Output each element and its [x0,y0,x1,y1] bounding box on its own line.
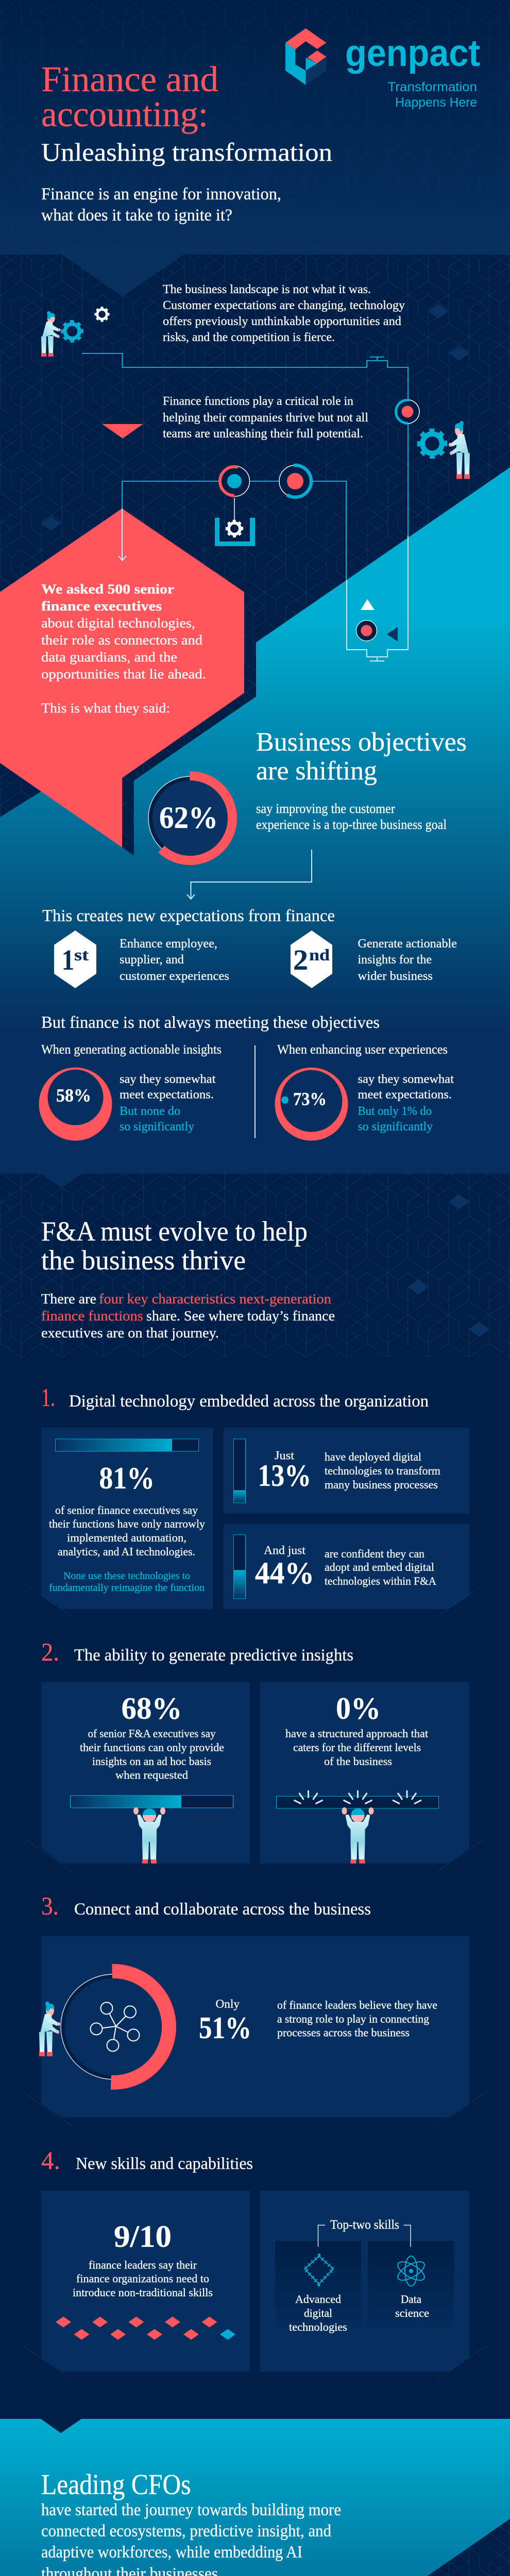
panel: 68%: when requested [115,1768,188,1782]
red hexagon panel [0,509,244,848]
panel: top-two skills [260,2191,486,2381]
panel: 13% [224,1428,469,1514]
title [41,60,332,166]
heading 1: Digital technology embedded across the organization [69,1392,429,1411]
panel: 68% [23,1682,250,1873]
text: 58% stat [120,1073,216,1133]
stat: 51%: a strong role to play in connecting [277,2012,429,2025]
text: journey: connected ecosystems, predictive insight, and [41,2522,331,2540]
decorative diamonds [408,1195,489,1336]
text: four key characteristics: There are [41,1291,96,1307]
stat: 51%: processes across the business [277,2026,410,2039]
text: business landscape [163,283,405,344]
panel: 9/10: introduce non-traditional skills [73,2286,213,2299]
icon: red triangle [102,424,143,438]
panel: 0%: have a structured approach that [285,1727,428,1740]
monitor contents [356,599,398,641]
text: four key characteristics: finance functions [41,1308,143,1324]
callout: survey text: data guardians, and the [41,650,177,665]
title: accounting: [41,95,208,134]
cyan gradient panel [0,467,510,1174]
text: 73% stat [358,1073,454,1133]
panel: 44% [224,1524,486,1618]
skill box: data science: Data [401,2293,421,2306]
heading: business objectives [256,727,467,786]
stat: 51% [199,1997,437,2045]
text: 58% stat: say they somewhat [120,1073,216,1086]
heading 3: Connect and collaborate across the business [74,1900,371,1919]
heading: F&A must evolve: F&A must evolve to help [41,1216,308,1247]
icon: person with large gear [419,421,470,479]
badge: 2nd [291,930,332,988]
text: business landscape: offers previously unthinkable opportunities and [163,315,401,328]
text: four key characteristics [41,1291,335,1341]
panel: 68%: their functions can only provide [80,1741,224,1754]
heading: leading CFOs: Leading CFOs [41,2469,191,2501]
panel: 9/10: finance organizations need to [76,2272,209,2285]
intro question: Finance is an engine for innovation, [41,185,281,204]
panel: 9/10: 9/10 [114,2219,172,2253]
title: Finance and [41,60,218,99]
text: four key characteristics: executives are on that journey. [41,1325,219,1341]
text: finance functions: teams are unleashing their full potential. [163,427,363,440]
genpact logo header [285,28,480,110]
section notch triangle [41,1174,81,1188]
panel: 13%: many business processes [325,1478,438,1491]
heading 3 [41,1891,371,1920]
intro question [41,185,281,225]
callout: survey text: finance executives [41,599,162,614]
panel: 13%: Just [275,1449,295,1462]
text: customer experience [256,801,447,832]
subheading: experiences: When enhancing user experiences [277,1043,448,1057]
panel: 81%: analytics, and AI technologies. [58,1545,195,1558]
text: finance functions: helping their companies thrive but not all [163,411,368,425]
panel: 81%: their functions have only narrowly [49,1517,205,1530]
genpact logo header: genpact [345,32,480,74]
text: journey: adaptive workforces, while embedding AI [41,2543,302,2562]
heading: business objectives: Business objectives [256,727,467,757]
text: second expectation: wider business [358,970,433,983]
text: 73% stat: But only 1% do [358,1105,432,1118]
panel: 51% [23,1936,486,2128]
patterned section background [0,1174,510,1358]
icon: person with gear [41,311,82,357]
panel: 68%: of senior F&A executives say [88,1727,215,1740]
panel: 44%: technologies within F&A [325,1574,436,1587]
icon: gauge circle right [396,400,419,423]
subheading: insights: When generating actionable insights [41,1043,222,1057]
chart: 62% donut: 62% [159,801,218,835]
badge: 1st: 1 [62,944,74,976]
skill box: data science [368,2241,454,2336]
heading: F&A must evolve: the business thrive [41,1245,246,1276]
panel: 81%: of senior finance executives say [55,1503,198,1517]
panel: 13%: technologies to transform [325,1464,440,1477]
icon: circle B [278,464,313,499]
section notch triangle [62,255,184,297]
hero background [0,0,510,255]
text: business landscape: risks, and the competition is fierce. [163,331,335,344]
callout: survey text: opportunities that lie ahead. [41,667,206,682]
chart: 58% ring: 58% [56,1085,91,1106]
text: business landscape: Customer expectations are changing, technology [163,299,405,312]
panel: 0%: of the business [324,1755,392,1768]
heading 2 [41,1637,353,1666]
panel: 0%: 0% [336,1691,381,1725]
skill box: data science: science [395,2307,429,2319]
closing gradient section [0,2419,510,2576]
skill box: advanced digital technologies: technologies [289,2320,347,2333]
badge: 2nd: 2 [293,944,308,976]
text: customer experience: experience is a top-three business goal [256,817,447,832]
badge: 2nd: nd [309,945,330,964]
callout: survey text [41,582,206,716]
icon: small white gear [95,308,109,321]
divider [254,1045,256,1138]
stat: 51%: Only [215,1997,240,2010]
badge: 1st [54,930,96,988]
panel: 81%: None use these technologies to [63,1570,190,1582]
text: 58% stat: so significantly [120,1120,194,1133]
text: journey: have started the journey towards building more [41,2501,341,2519]
text: four key characteristics: four key characteristics next-generation [99,1291,332,1307]
skill box: advanced digital technologies: digital [304,2307,332,2319]
heading: business objectives: are shifting [256,756,377,786]
text: second expectation [358,937,457,983]
callout: survey text: about digital technologies, [41,616,195,631]
text: 73% stat: say they somewhat [358,1073,454,1086]
navy diagonal corner [42,2519,510,2576]
text: finance functions: Finance functions play a critical role in [163,395,353,408]
text: second expectation: insights for the [358,953,432,967]
pipe lines [82,353,408,580]
panel: 44%: adopt and embed digital [325,1561,434,1573]
panel: 81%: fundamentally reimagine the function [49,1582,205,1594]
chart: ten diamonds [56,2316,235,2340]
callout: survey text: This is what they said: [41,701,170,716]
heading 4: New skills and capabilities [76,2155,253,2173]
panel: 68%: insights on an ad hoc basis [92,1755,211,1768]
skill box: advanced digital technologies: Advanced [295,2293,341,2306]
chart: 73% ring [275,1067,348,1141]
text: 58% stat: meet expectations. [120,1088,214,1101]
text: first expectation: Enhance employee, [120,937,217,951]
callout: survey text: We asked 500 senior [41,582,174,597]
genpact logo header: Transformation [387,80,477,94]
heading 2: 2. [41,1637,59,1666]
panel: 44%: are confident they can [325,1547,424,1560]
panel: 81%: implemented automation, [67,1531,186,1544]
panel: 81% [23,1428,213,1618]
panel: 13%: 13% [258,1459,311,1493]
panel: 13%: have deployed digital [325,1450,421,1463]
decorative diamonds [41,304,469,531]
panel: 9/10 [23,2191,250,2381]
heading: F&A must evolve [41,1216,308,1276]
chart: 62% donut [148,776,232,860]
panel: 81%: 81% [99,1461,155,1495]
arrow connector [187,850,312,899]
text: 58% stat: But none do [120,1105,180,1118]
text: 73% stat: meet expectations. [358,1088,452,1101]
label: top-two skills with bracket: Top-two skills [330,2218,399,2232]
text: journey [41,2501,341,2576]
label: top-two skills with bracket [318,2218,411,2247]
heading 4 [41,2146,253,2175]
pale pipe lines on cyan [118,498,408,661]
heading: new expectations: This creates new expectations from finance [42,907,335,925]
text: business landscape: The business landscape is not what it was. [163,283,371,296]
title: Unleashing transformation [41,138,332,166]
text: second expectation: Generate actionable [358,937,457,951]
text: first expectation: customer experiences [120,970,229,983]
heading 1: 1. [41,1383,55,1412]
stat: 51%: of finance leaders believe they have [277,1998,437,2011]
text: customer experience: say improving the customer [256,801,395,816]
genpact logo header: Happens Here [395,95,477,110]
callout: survey text: their role as connectors and [41,633,202,648]
text: first expectation: supplier, and [120,953,184,967]
badge: 1st: st [74,945,89,964]
text: finance functions [163,395,368,440]
notch triangle [41,2419,81,2433]
heading 2: The ability to generate predictive insights [74,1646,353,1665]
chart: 51% donut [57,1970,170,2083]
panel: 0% [260,1682,486,1873]
heading 4: 4. [41,2146,60,2175]
icon: circle A [219,466,249,497]
heading 1 [41,1383,429,1412]
panel: 0%: caters for the different levels [293,1741,421,1754]
stat: 51%: 51% [199,2011,251,2045]
panel: 44%: And just [264,1544,306,1557]
panel: 9/10: finance leaders say their [89,2259,197,2271]
icon: network [91,2002,139,2052]
panel: 68%: 68% [122,1691,182,1725]
heading: not meeting objectives: But finance is not always meeting these objectives [41,1013,380,1032]
heading 3: 3. [41,1891,59,1920]
icon: gear in tray [215,518,255,546]
patterned dark section background [0,255,510,883]
icon: person [39,2002,60,2056]
text: first expectation [120,937,229,983]
skill box: advanced digital technologies [275,2241,361,2336]
text: 73% stat: so significantly [358,1120,433,1133]
chart: 58% ring [39,1067,112,1141]
text: four key characteristics: share. See where today’s finance [146,1308,335,1324]
intro question: what does it take to ignite it? [41,206,232,225]
chart: 73% ring: 73% [293,1089,327,1109]
panel: 44%: 44% [255,1556,314,1590]
